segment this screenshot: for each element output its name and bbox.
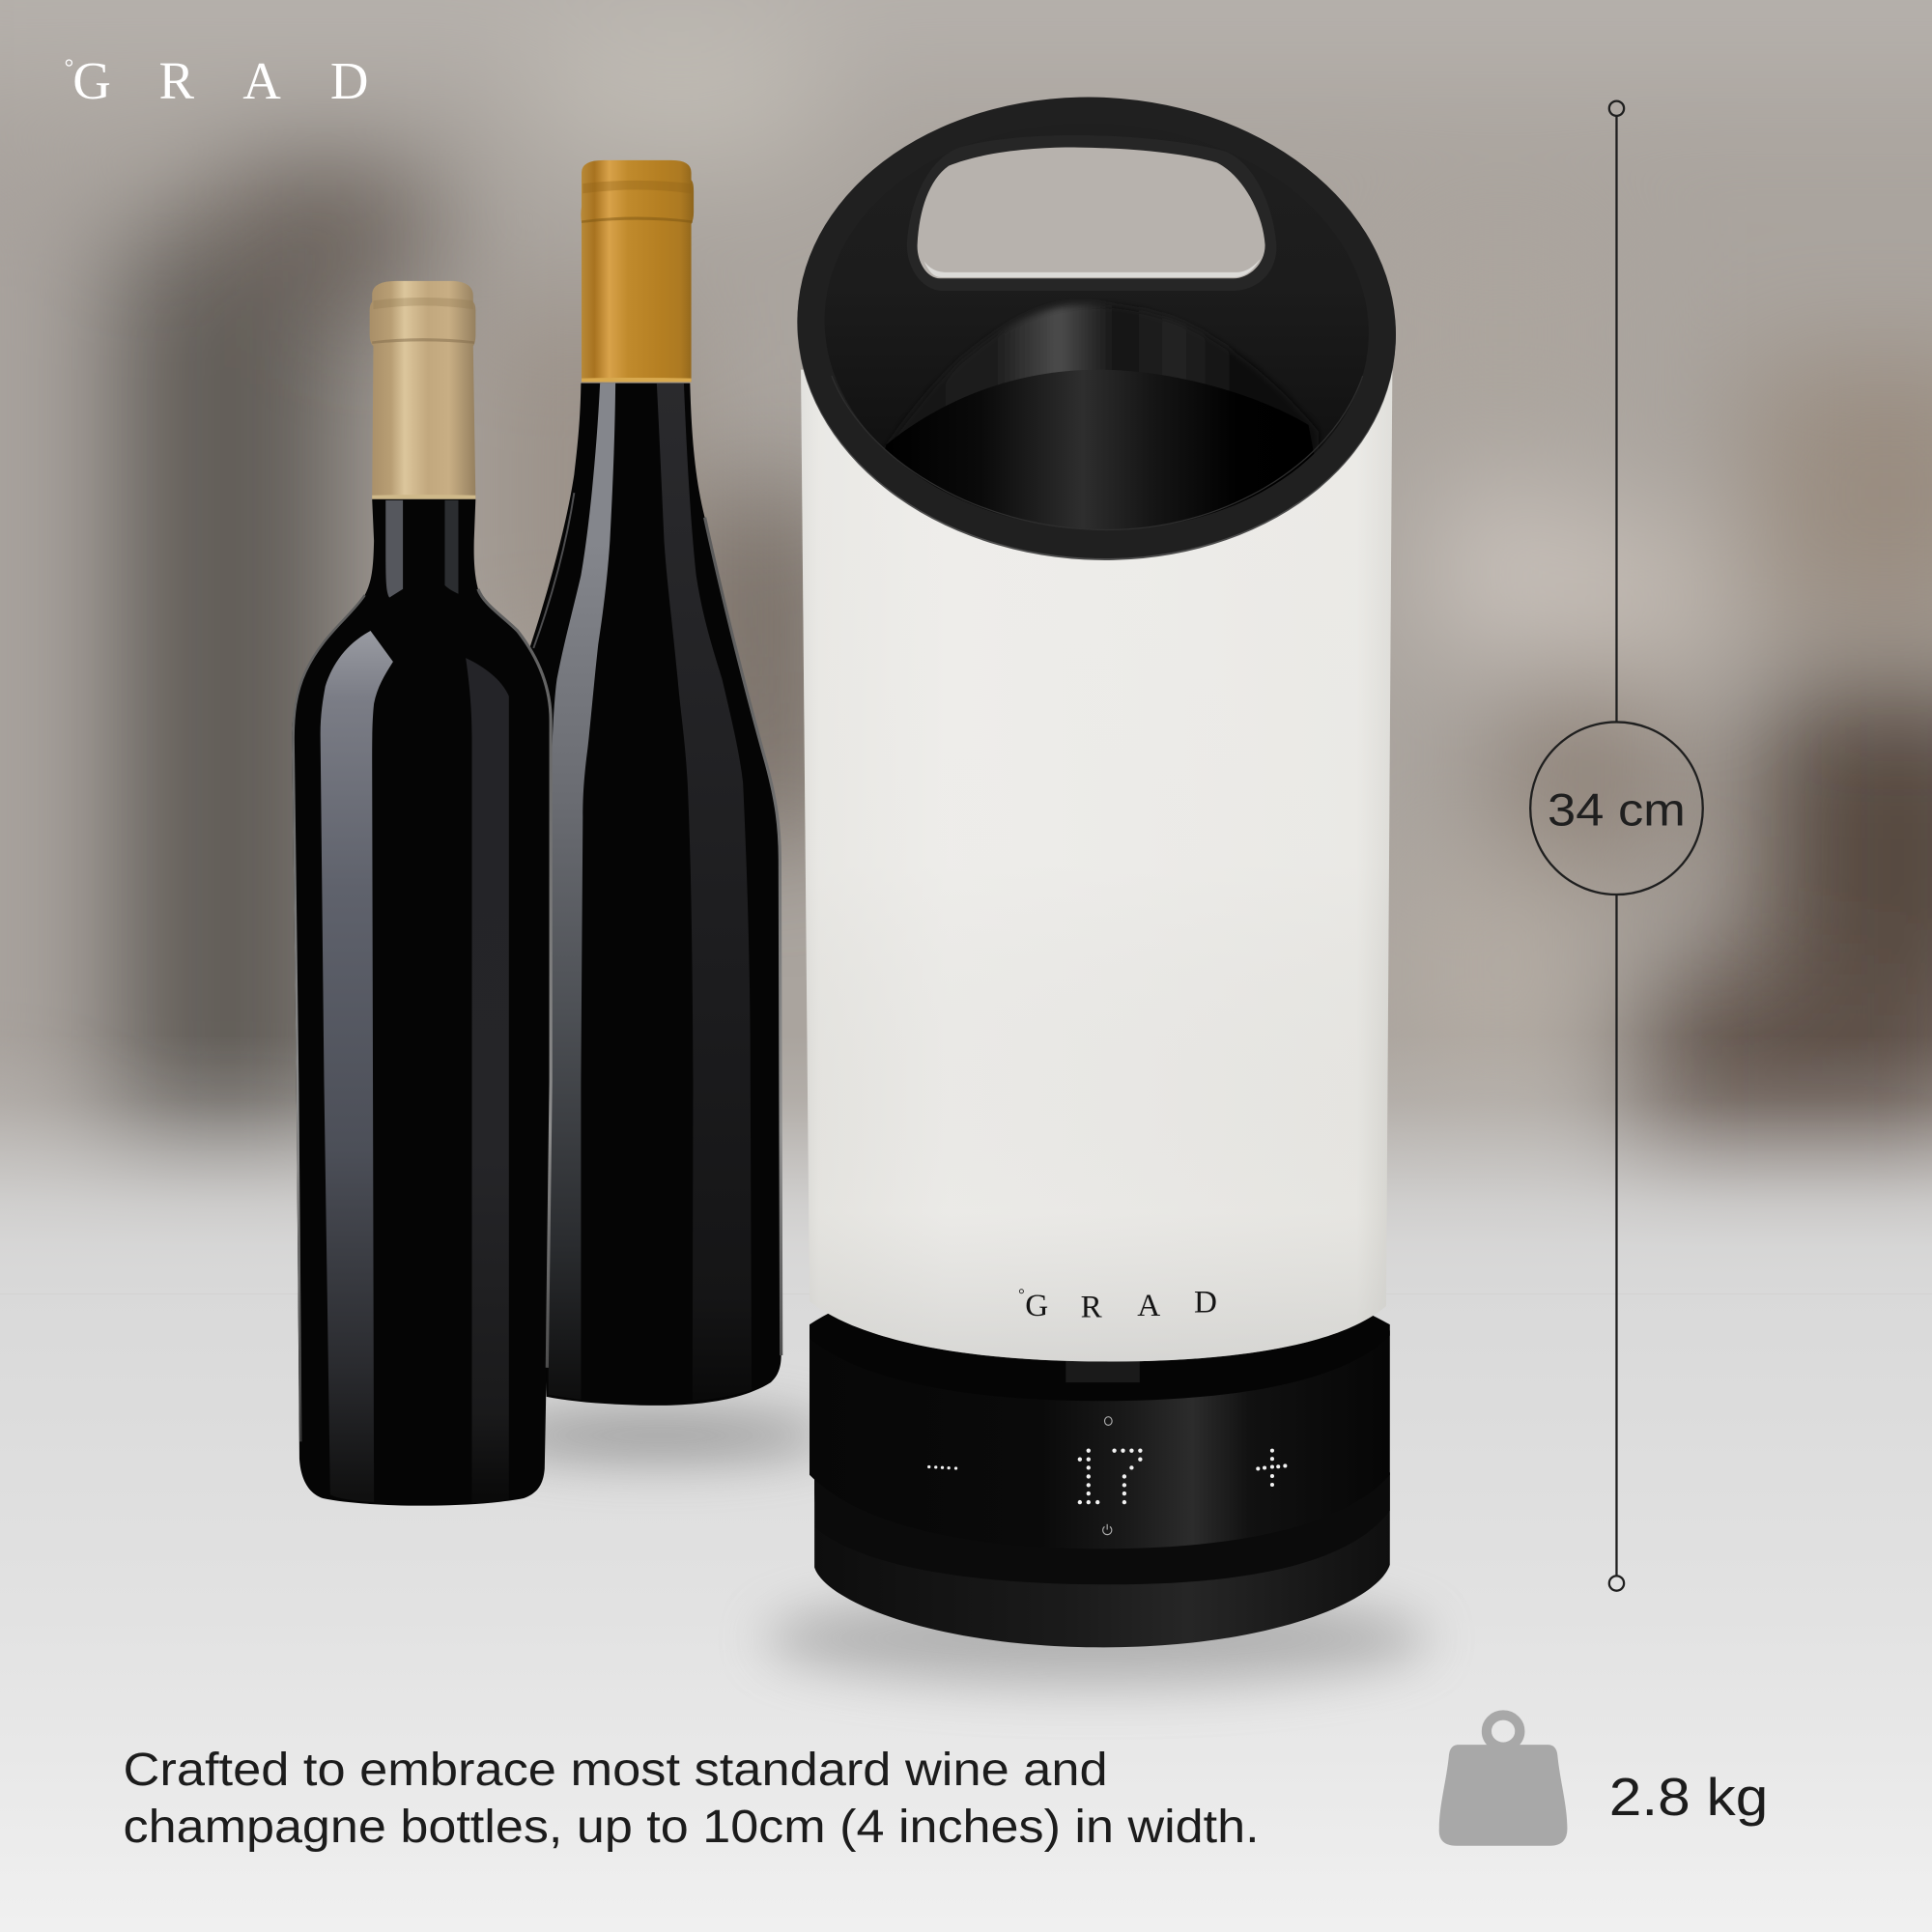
description text	[124, 1744, 1260, 1853]
neck highlights	[385, 500, 403, 598]
stub under body	[1065, 1358, 1140, 1382]
silhouette	[292, 499, 552, 1506]
plus	[1256, 1449, 1287, 1487]
white body	[801, 370, 1392, 1361]
ring icon	[1104, 1417, 1112, 1425]
dimension: height: 34 cm	[1548, 785, 1686, 837]
inner lip, lower half	[832, 376, 1363, 529]
body logo: GRAD	[1025, 1284, 1217, 1325]
icon: weight	[1439, 1716, 1567, 1846]
back bottle: dark gold capsule	[529, 160, 781, 1406]
description text: Crafted to embrace most standard wine and	[124, 1744, 1108, 1796]
floor shadows	[487, 1410, 1430, 1686]
left inner reflection	[533, 493, 574, 648]
digits: 17	[1078, 1448, 1143, 1504]
capsule	[581, 160, 694, 382]
right rim	[705, 518, 781, 1355]
display icons and digits	[927, 1417, 1287, 1535]
lower disc	[814, 1472, 1390, 1647]
minus	[927, 1465, 957, 1470]
control band	[810, 1301, 1390, 1548]
silhouette	[529, 384, 781, 1406]
weight value: 2.8 kg	[1609, 1767, 1768, 1827]
rim edge	[785, 84, 1407, 576]
product: GRAD cooler	[785, 82, 1407, 1647]
power icon	[1103, 1524, 1112, 1535]
left highlight	[549, 384, 615, 1400]
capsule	[370, 281, 475, 499]
dimension: height	[1530, 101, 1703, 1591]
right tone band	[657, 384, 752, 1401]
main highlight	[321, 631, 393, 1502]
secondary band	[466, 658, 509, 1503]
description text: champagne bottles, up to 10cm (4 inches) in width.	[124, 1801, 1260, 1853]
left rim	[294, 595, 365, 1441]
handle opening	[907, 135, 1276, 291]
front bottle: champagne capsule	[292, 281, 552, 1506]
rim	[785, 82, 1407, 574]
mouth interior	[828, 301, 1368, 529]
right rim	[478, 589, 551, 1368]
logo: GRAD: GRAD	[72, 51, 368, 110]
